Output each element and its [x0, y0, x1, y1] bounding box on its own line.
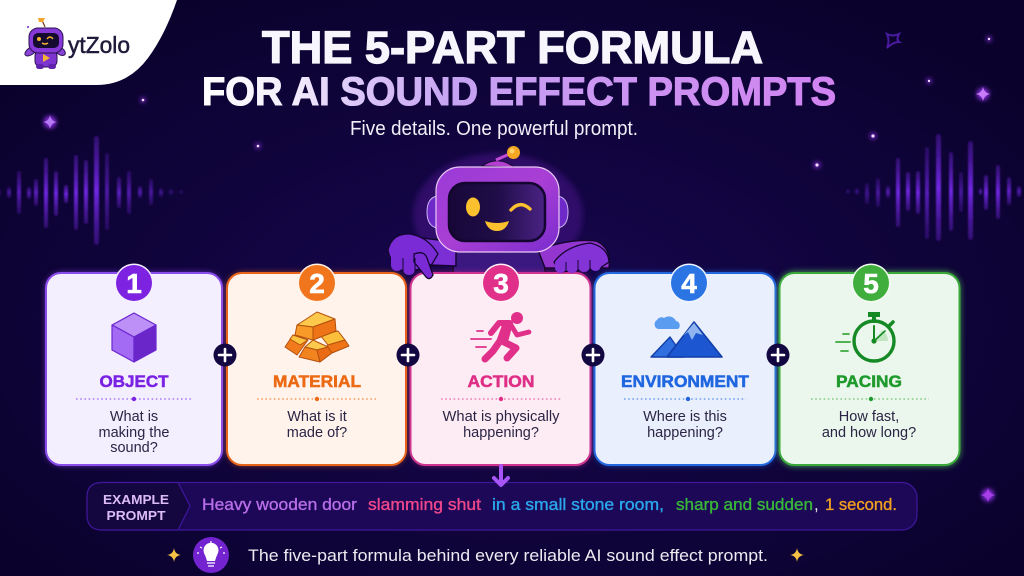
question: made of?	[287, 425, 347, 441]
robot face	[449, 183, 545, 241]
prompt text: Heavy wooden door	[202, 495, 357, 514]
question: How fast,	[839, 409, 899, 425]
footer text: The five-part formula behind every reliable AI sound effect prompt.	[248, 546, 768, 565]
footer	[167, 537, 804, 573]
icon: runner	[471, 312, 529, 359]
question: What is it	[287, 409, 347, 425]
icon: stopwatch	[836, 313, 894, 361]
robot hands	[388, 234, 609, 279]
prompt label: EXAMPLE	[103, 492, 169, 507]
example prompt bar	[87, 482, 917, 530]
question: making the	[99, 425, 169, 441]
number badge 4: 4	[681, 268, 697, 299]
stars	[43, 34, 996, 502]
divider	[624, 397, 746, 401]
robot antenna	[482, 146, 520, 167]
question: What is	[110, 409, 158, 425]
prompt text: sharp and sudden	[676, 495, 813, 514]
divider	[76, 397, 193, 401]
heading: PACING	[836, 373, 902, 391]
number badge 2: 2	[309, 268, 325, 299]
icon: gold bars	[285, 312, 349, 362]
logo robot icon	[23, 18, 67, 69]
question: and how long?	[822, 425, 916, 441]
prompt text: in a small stone room,	[492, 495, 664, 514]
prompt text: ,	[814, 495, 819, 514]
prompt text	[202, 495, 897, 514]
heading: MATERIAL	[273, 373, 361, 391]
left hand	[388, 234, 438, 279]
icon: right star	[790, 548, 804, 562]
question	[643, 409, 727, 441]
divider	[811, 397, 929, 401]
icon: mountains and cloud	[651, 316, 722, 357]
prompt label: PROMPT	[106, 508, 166, 523]
divider	[441, 397, 561, 401]
card 3: action	[410, 264, 592, 466]
robot mascot	[397, 146, 609, 282]
right hand	[554, 243, 609, 273]
icon: light bulb	[193, 537, 229, 573]
card 2: material	[226, 264, 407, 466]
heading: ACTION	[468, 373, 534, 391]
robot body	[397, 236, 609, 282]
arrow	[494, 466, 508, 485]
title: FOR AI SOUND EFFECT PROMPTS	[202, 70, 836, 114]
plus connectors	[214, 344, 790, 366]
card 4: environment	[594, 264, 777, 466]
title: THE 5-PART FORMULA	[262, 22, 763, 73]
robot head	[436, 167, 559, 252]
logo wordmark: ytZolo	[68, 32, 130, 58]
title	[202, 22, 836, 114]
question	[822, 409, 916, 441]
heading: OBJECT	[100, 373, 168, 391]
question: sound?	[110, 440, 158, 456]
divider	[257, 397, 376, 401]
card 1: object	[45, 264, 223, 466]
robot ears	[427, 196, 568, 228]
question: What is physically	[442, 409, 560, 425]
subtitle: Five details. One powerful prompt.	[350, 118, 638, 140]
prompt label	[87, 482, 190, 530]
question	[287, 409, 347, 441]
icon: cube	[112, 313, 156, 362]
question	[442, 409, 560, 441]
logo panel	[0, 0, 177, 85]
robot glow	[413, 153, 583, 277]
question: Where is this	[643, 409, 727, 425]
heading: ENVIRONMENT	[621, 373, 749, 391]
number badge 5: 5	[863, 268, 879, 299]
number badge 2	[298, 264, 336, 302]
number badge 3: 3	[493, 268, 509, 299]
number badge 1	[114, 264, 154, 302]
prompt text: slamming shut	[368, 495, 481, 514]
waveform left	[0, 136, 183, 245]
icon: left star	[167, 548, 181, 562]
number badge 4	[670, 264, 708, 302]
question: happening?	[463, 425, 539, 441]
question: happening?	[647, 425, 723, 441]
waveform right	[846, 134, 1021, 241]
number badge 5	[852, 264, 890, 302]
question	[99, 409, 169, 456]
number badge 3	[482, 264, 520, 302]
prompt text: 1 second.	[825, 495, 897, 514]
number badge 1: 1	[126, 268, 142, 299]
card 5: pacing	[778, 264, 961, 467]
